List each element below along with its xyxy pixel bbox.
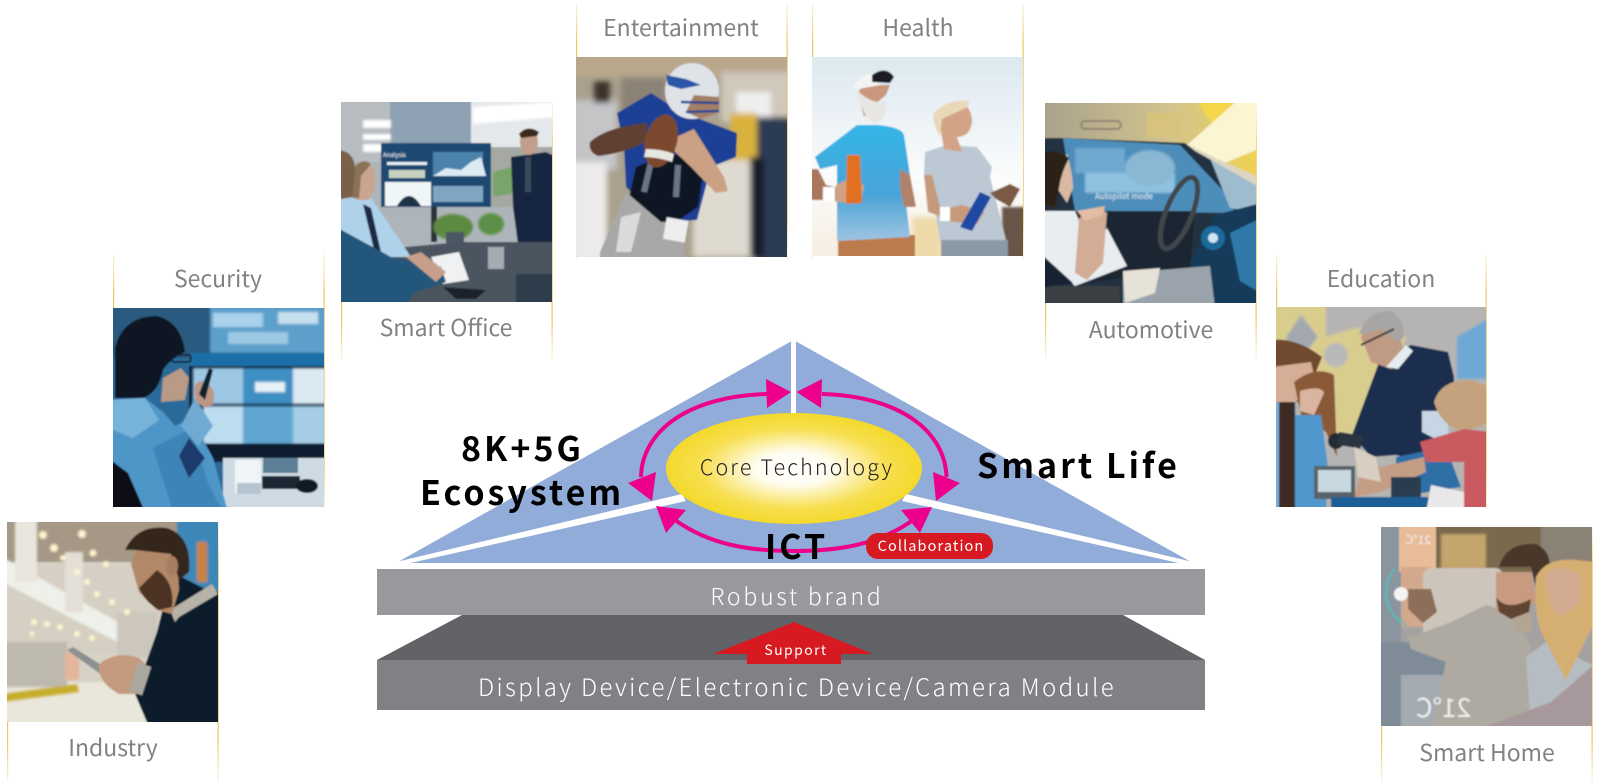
heading: Entertainment: Entertainment [603,9,759,43]
shape: blue triangle [396,340,1193,563]
heading: Smart Home: Smart Home [1419,734,1555,768]
heading: Health: Health [882,9,954,43]
arrow: Support: Support [764,640,828,660]
shape: dark trapezoid [377,615,1205,660]
label: 8K+5G: 8K+5G [461,422,584,471]
photo: couple with smart home hologram: 21°C [1405,531,1431,548]
oval: Core Technology: Core Technology [700,451,894,482]
arrow: Support [713,622,873,664]
photo: woman in self-driving car: Autopilot mode [1095,191,1154,202]
photo: meeting with video screen: Analysis [383,150,406,159]
panel: Health [807,3,1028,261]
panel: Security [108,254,329,512]
bar: Display Device/Electronic Device/Camera Module [377,660,1205,710]
panel: Entertainment [571,3,792,262]
heading: Automotive: Automotive [1089,311,1213,345]
divider: lower left white line [396,494,686,564]
divider: lower right white line [902,494,1193,564]
photo: security officer at monitors [113,308,324,507]
panel: Smart Home [1376,522,1597,782]
oval: Core Technology [666,413,922,524]
label: Ecosystem: Ecosystem [420,466,624,515]
photo: engineer with tablet in warehouse [7,522,218,722]
panel: Education [1271,254,1491,512]
bar: Robust brand [377,569,1205,615]
badge: Collaboration [866,533,993,559]
heading: Education: Education [1327,260,1435,294]
bar: Robust brand: Robust brand [710,578,884,612]
photo: couple with smart home hologram [1381,527,1592,726]
photo: senior couple jogging [812,57,1023,256]
photo: couple with smart home hologram: 21°C [1416,688,1471,725]
photo: woman in self-driving car [1045,103,1256,303]
panel: Industry [2,517,223,782]
arrow: top right arc [796,379,960,501]
arrow: bottom arc [656,506,932,551]
arrow: top left arc [628,379,791,501]
diagram: core technology triangle [396,336,1193,569]
divider: vertical white line [791,336,796,416]
badge: Collaboration: Collaboration [878,535,984,556]
photo: meeting with video screen [341,102,552,302]
heading: Security: Security [174,260,262,294]
label: ICT: ICT [765,520,828,569]
panel: Smart Office [336,97,557,360]
label: Smart Life: Smart Life [977,439,1180,488]
photo: teacher and students with robot [1276,307,1486,507]
heading: Industry: Industry [68,729,158,763]
photo: american football quarterback [576,57,787,257]
bar: Display Device/Electronic Device/Camera Module: Display Device/Electronic Device/Camera Module [478,668,1116,703]
heading: Smart Office: Smart Office [380,309,512,343]
foundation: layered support platform [377,569,1205,710]
panel: Automotive [1040,98,1261,358]
